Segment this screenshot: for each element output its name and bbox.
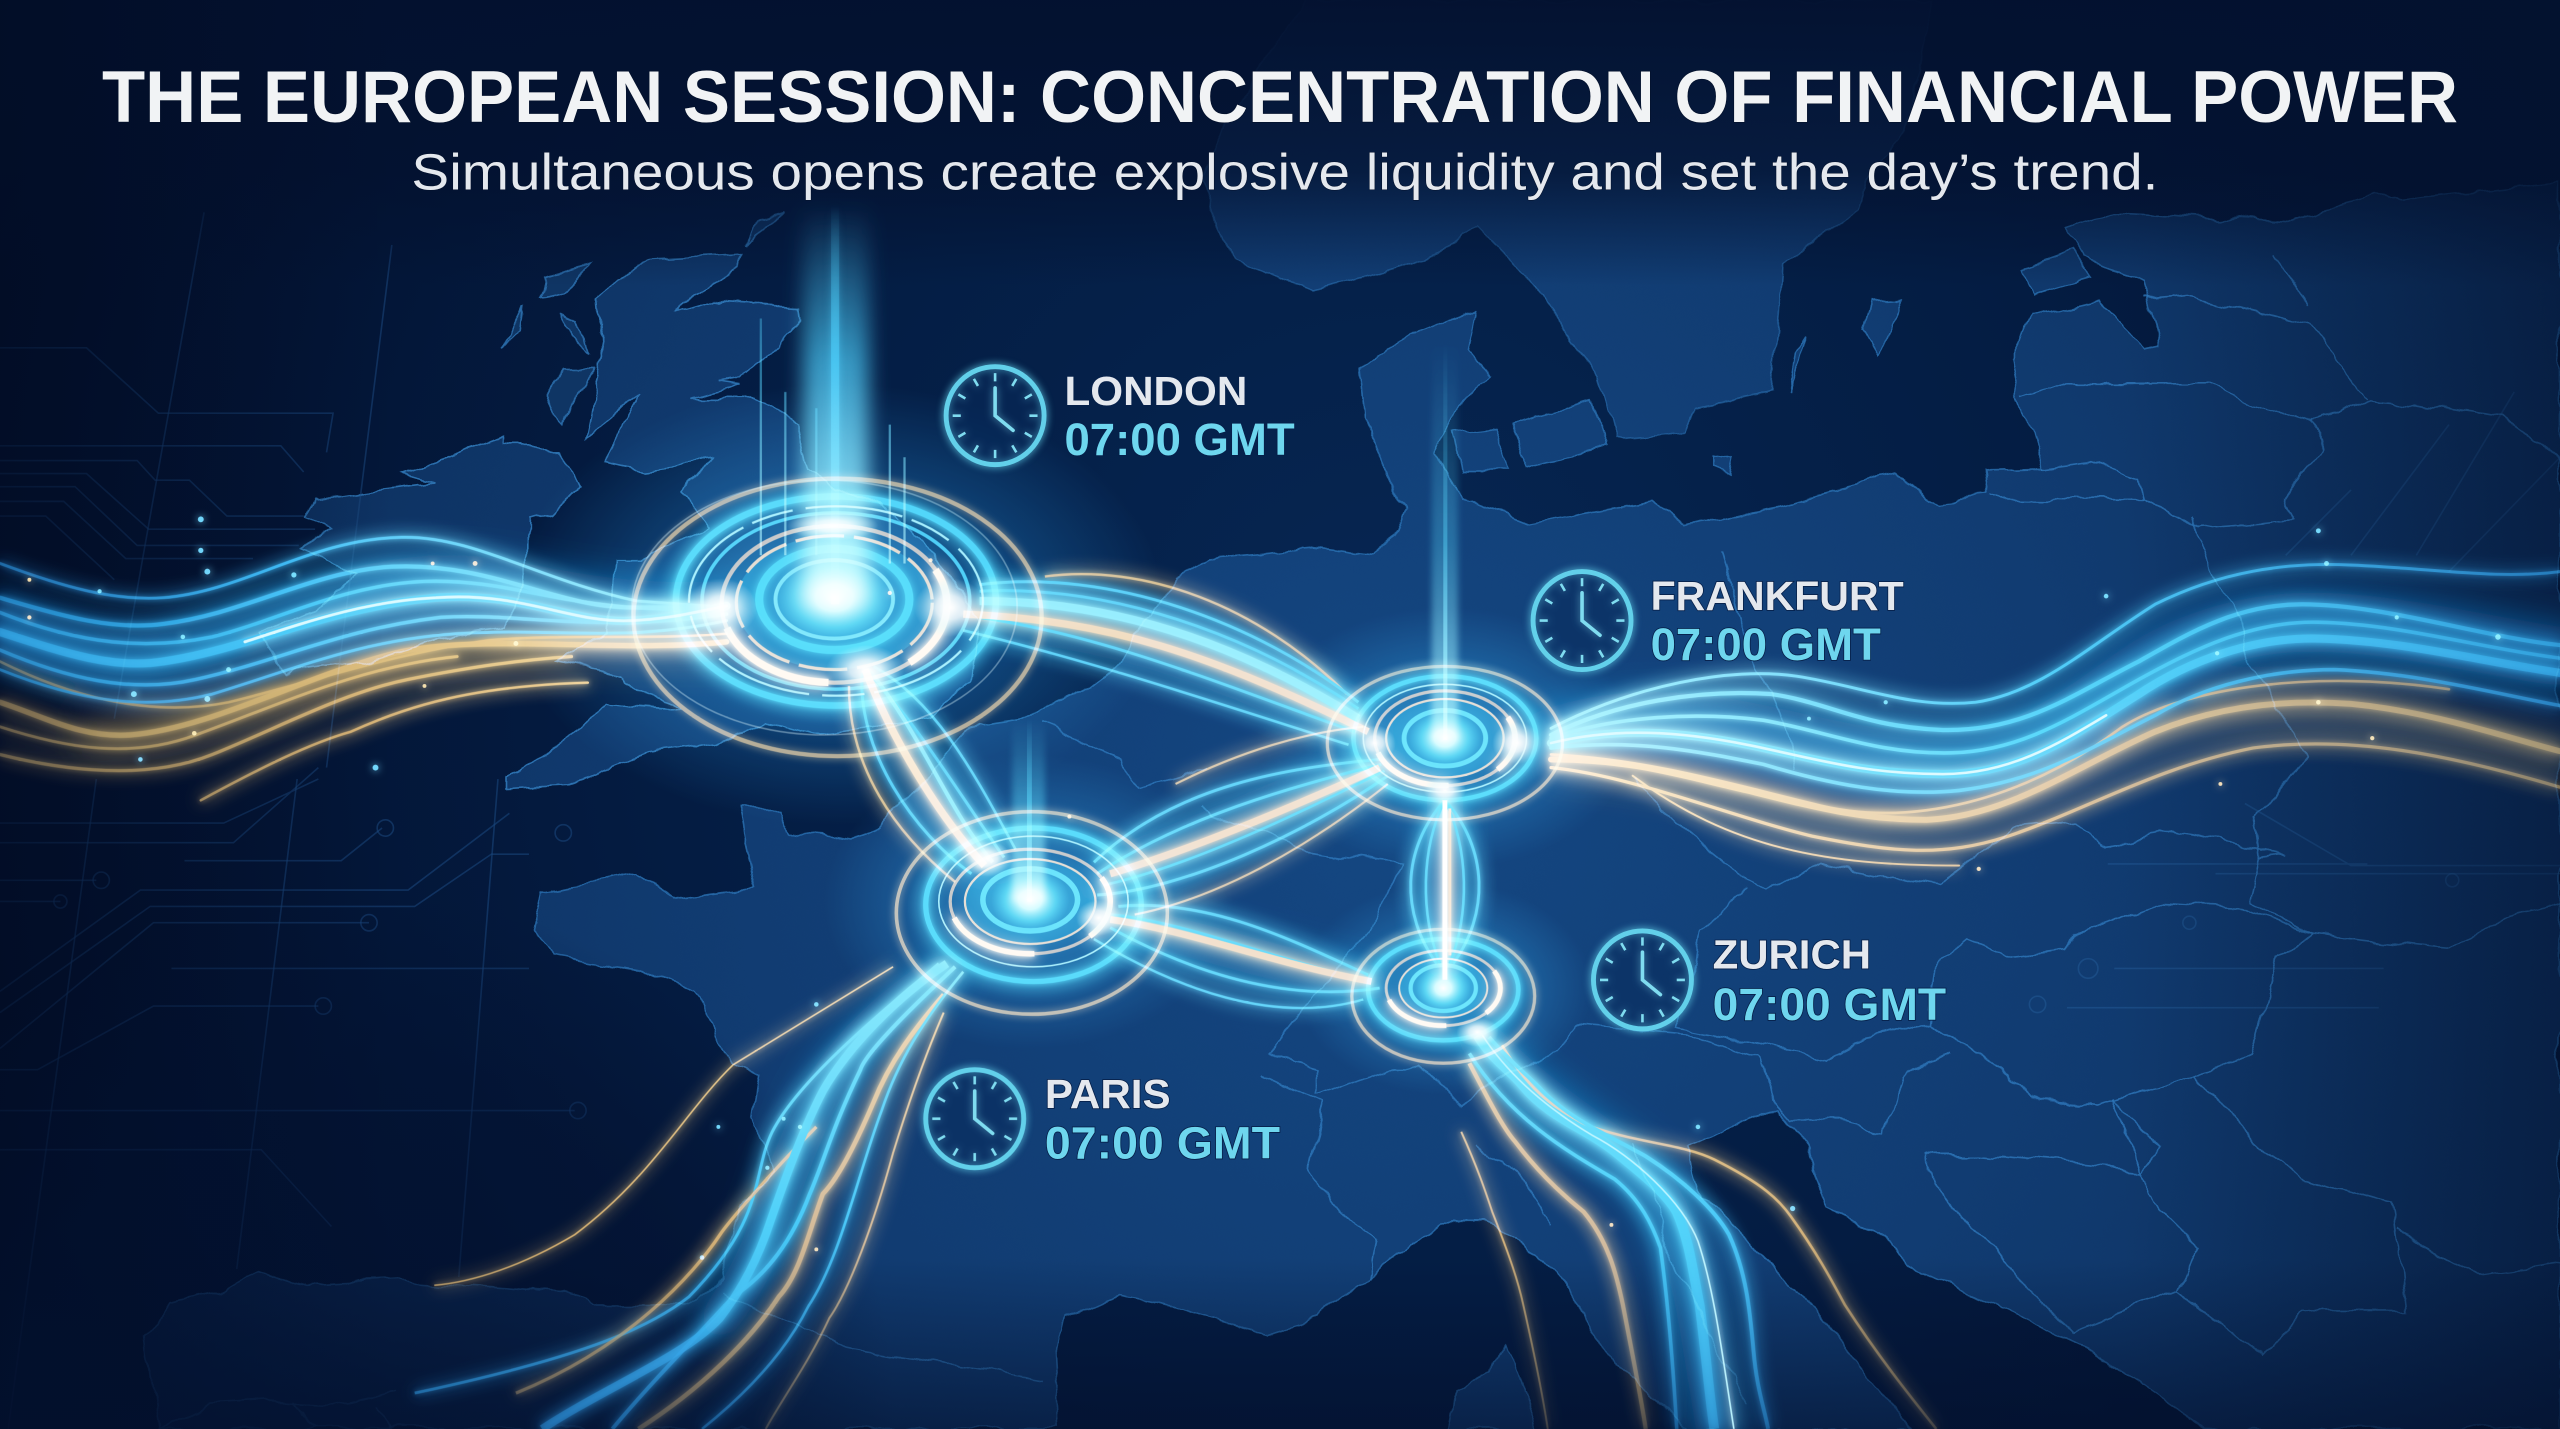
node: London hub rings <box>632 479 1042 756</box>
icon: London clock <box>946 367 1044 465</box>
city name: London: LONDON <box>1064 368 1247 414</box>
open time: Paris: 07:00 GMT <box>1045 1118 1280 1169</box>
open time: Frankfurt: 07:00 GMT <box>1651 619 1881 670</box>
link: Frankfurt to Zurich <box>1411 800 1479 980</box>
beam: London <box>761 204 904 604</box>
label: Paris <box>926 1070 1280 1169</box>
map: Corsica <box>1448 1342 1538 1429</box>
particles <box>27 516 2501 1260</box>
map: country borders <box>160 256 2560 1429</box>
subtitle: Simultaneous opens create explosive liquidity and set the day’s trend. <box>411 143 2158 200</box>
beam: Frankfurt <box>1432 343 1458 740</box>
map: circuit board pattern, right <box>2029 392 2560 1013</box>
map: Great Britain <box>504 253 980 786</box>
node: Paris hub rings <box>896 812 1167 1014</box>
map: Scandinavia <box>1200 0 1935 439</box>
node: Zurich hub rings <box>1352 929 1535 1063</box>
node halos <box>509 384 1633 1094</box>
city name: Zurich: ZURICH <box>1713 931 1871 977</box>
map: Ireland <box>258 438 576 674</box>
link: London to Frankfurt <box>963 574 1368 745</box>
map: circuit board pattern, left <box>0 212 586 1429</box>
light beams rising from nodes <box>761 204 1458 901</box>
label: Frankfurt <box>1533 572 1904 670</box>
soft light bands under the streams <box>0 584 2560 1429</box>
node: Frankfurt hub rings <box>1327 666 1562 820</box>
data stream: eastern flow from Frankfurt <box>1551 564 2560 866</box>
label: London <box>946 367 1295 465</box>
icon: Frankfurt clock <box>1533 572 1631 670</box>
title: THE EUROPEAN SESSION: CONCENTRATION OF FINANCIAL POWER <box>102 55 2458 138</box>
city name: Frankfurt: FRANKFURT <box>1651 573 1904 619</box>
icon: Zurich clock <box>1593 931 1691 1029</box>
link: Paris to Zurich <box>1094 905 1380 1008</box>
open time: London: 07:00 GMT <box>1064 414 1295 465</box>
data stream: south from Zurich <box>1461 1035 1936 1429</box>
open time: Zurich: 07:00 GMT <box>1713 979 1946 1030</box>
data stream: south-west from Paris <box>415 964 963 1429</box>
map: Hebrides <box>500 212 780 421</box>
beam: Paris <box>1012 719 1045 901</box>
map: Baltic islands <box>1714 253 2090 474</box>
map: Danish islands <box>1453 402 1607 474</box>
link: Paris to Frankfurt <box>1094 727 1388 915</box>
city name: Paris: PARIS <box>1045 1071 1171 1117</box>
link: London to Paris <box>849 666 1016 882</box>
data stream: western flow into London <box>0 537 727 800</box>
icon: Paris clock <box>926 1070 1024 1168</box>
label: Zurich <box>1593 931 1946 1030</box>
